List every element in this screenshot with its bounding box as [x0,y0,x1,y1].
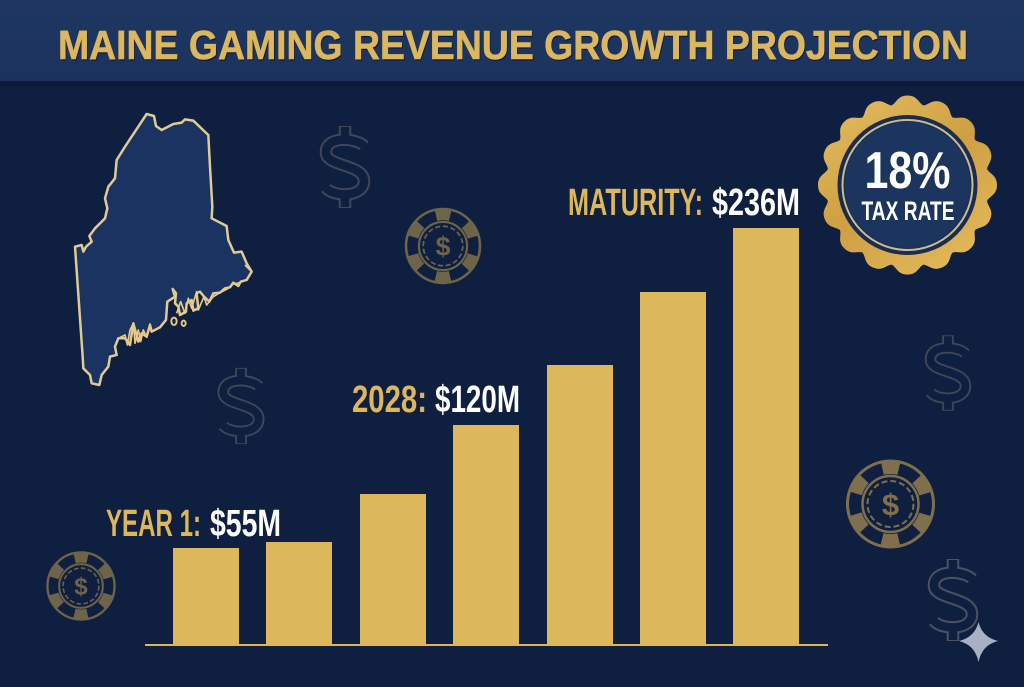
header band [0,0,1024,87]
bar chart [145,228,828,646]
bar 6 [640,292,706,644]
bar 1 [173,548,239,644]
icon: poker chip left: $ [74,574,88,601]
bar 4 [453,425,519,644]
badge value: 18% [864,142,950,200]
label: 2028: 2028: [352,379,427,421]
bar 2 [266,542,332,644]
icon: poker chip right [848,461,934,547]
icon: dollar sign bottom right [934,559,972,641]
badge caption: TAX RATE [862,196,954,226]
icon: dollar sign right [930,335,965,411]
icon: sparkle [959,622,998,662]
label: maturity: $236M [712,182,800,224]
icon: poker chip right: $ [882,487,899,522]
icon: poker chip left [47,552,115,620]
map of Maine [75,114,252,385]
icon: poker chip centre: $ [436,231,451,261]
icon: poker chip centre [406,209,480,283]
badge: 18% tax rate [818,96,997,274]
bar 3 [360,494,426,644]
label: 2028 [352,379,520,421]
icon: dollar sign left [223,368,259,444]
icon: dollar sign top [326,126,364,208]
bar 7 [733,228,799,644]
bar 5 [547,365,613,644]
label: maturity: MATURITY: [568,182,703,224]
label: year 1: YEAR 1: [106,503,201,545]
label: 2028: $120M [435,379,520,421]
label: year 1: $55M [210,503,281,545]
axis line [145,644,828,646]
